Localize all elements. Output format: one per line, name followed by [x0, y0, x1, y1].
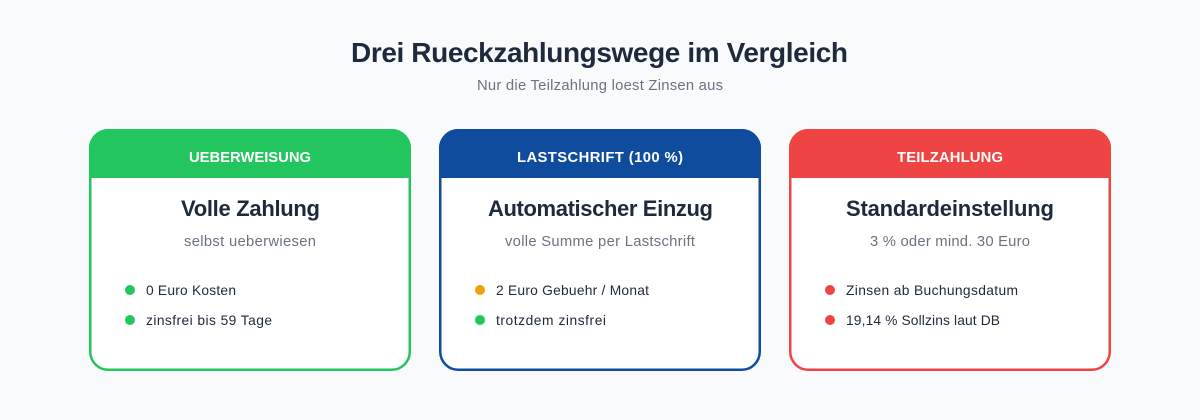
card subheading: 3 % oder mind. 30 Euro	[870, 234, 1030, 250]
title: Drei Rueckzahlungswege im Vergleich	[351, 37, 848, 68]
list item: interest rate: 19,14 % Sollzins laut DB	[846, 313, 1000, 328]
card heading: Volle Zahlung	[181, 196, 320, 221]
panel: Teilzahlung	[789, 129, 1111, 370]
list item: interest-free: trotzdem zinsfrei	[496, 313, 606, 328]
card heading: Automatischer Einzug	[488, 196, 713, 221]
header band: Ueberweisung	[89, 129, 411, 178]
header band: Teilzahlung: TEILZAHLUNG	[897, 150, 1003, 166]
header band: Lastschrift: LASTSCHRIFT (100 %)	[517, 150, 683, 166]
list item: fee: 2 Euro Gebuehr / Monat	[496, 283, 649, 298]
panel: Ueberweisung	[89, 129, 411, 370]
list item: cost: 0 Euro Kosten	[146, 283, 236, 298]
card heading: Standardeinstellung	[846, 196, 1054, 221]
subtitle: Nur die Teilzahlung loest Zinsen aus	[477, 78, 723, 94]
list item: interest start: Zinsen ab Buchungsdatum	[846, 283, 1018, 298]
list item: interest-free: zinsfrei bis 59 Tage	[146, 313, 272, 328]
header band: Lastschrift	[439, 129, 761, 178]
panel: Lastschrift	[439, 129, 761, 370]
header band: Teilzahlung	[789, 129, 1111, 178]
header band: Ueberweisung: UEBERWEISUNG	[189, 150, 311, 166]
card subheading: volle Summe per Lastschrift	[505, 234, 695, 250]
card subheading: selbst ueberwiesen	[184, 234, 316, 250]
